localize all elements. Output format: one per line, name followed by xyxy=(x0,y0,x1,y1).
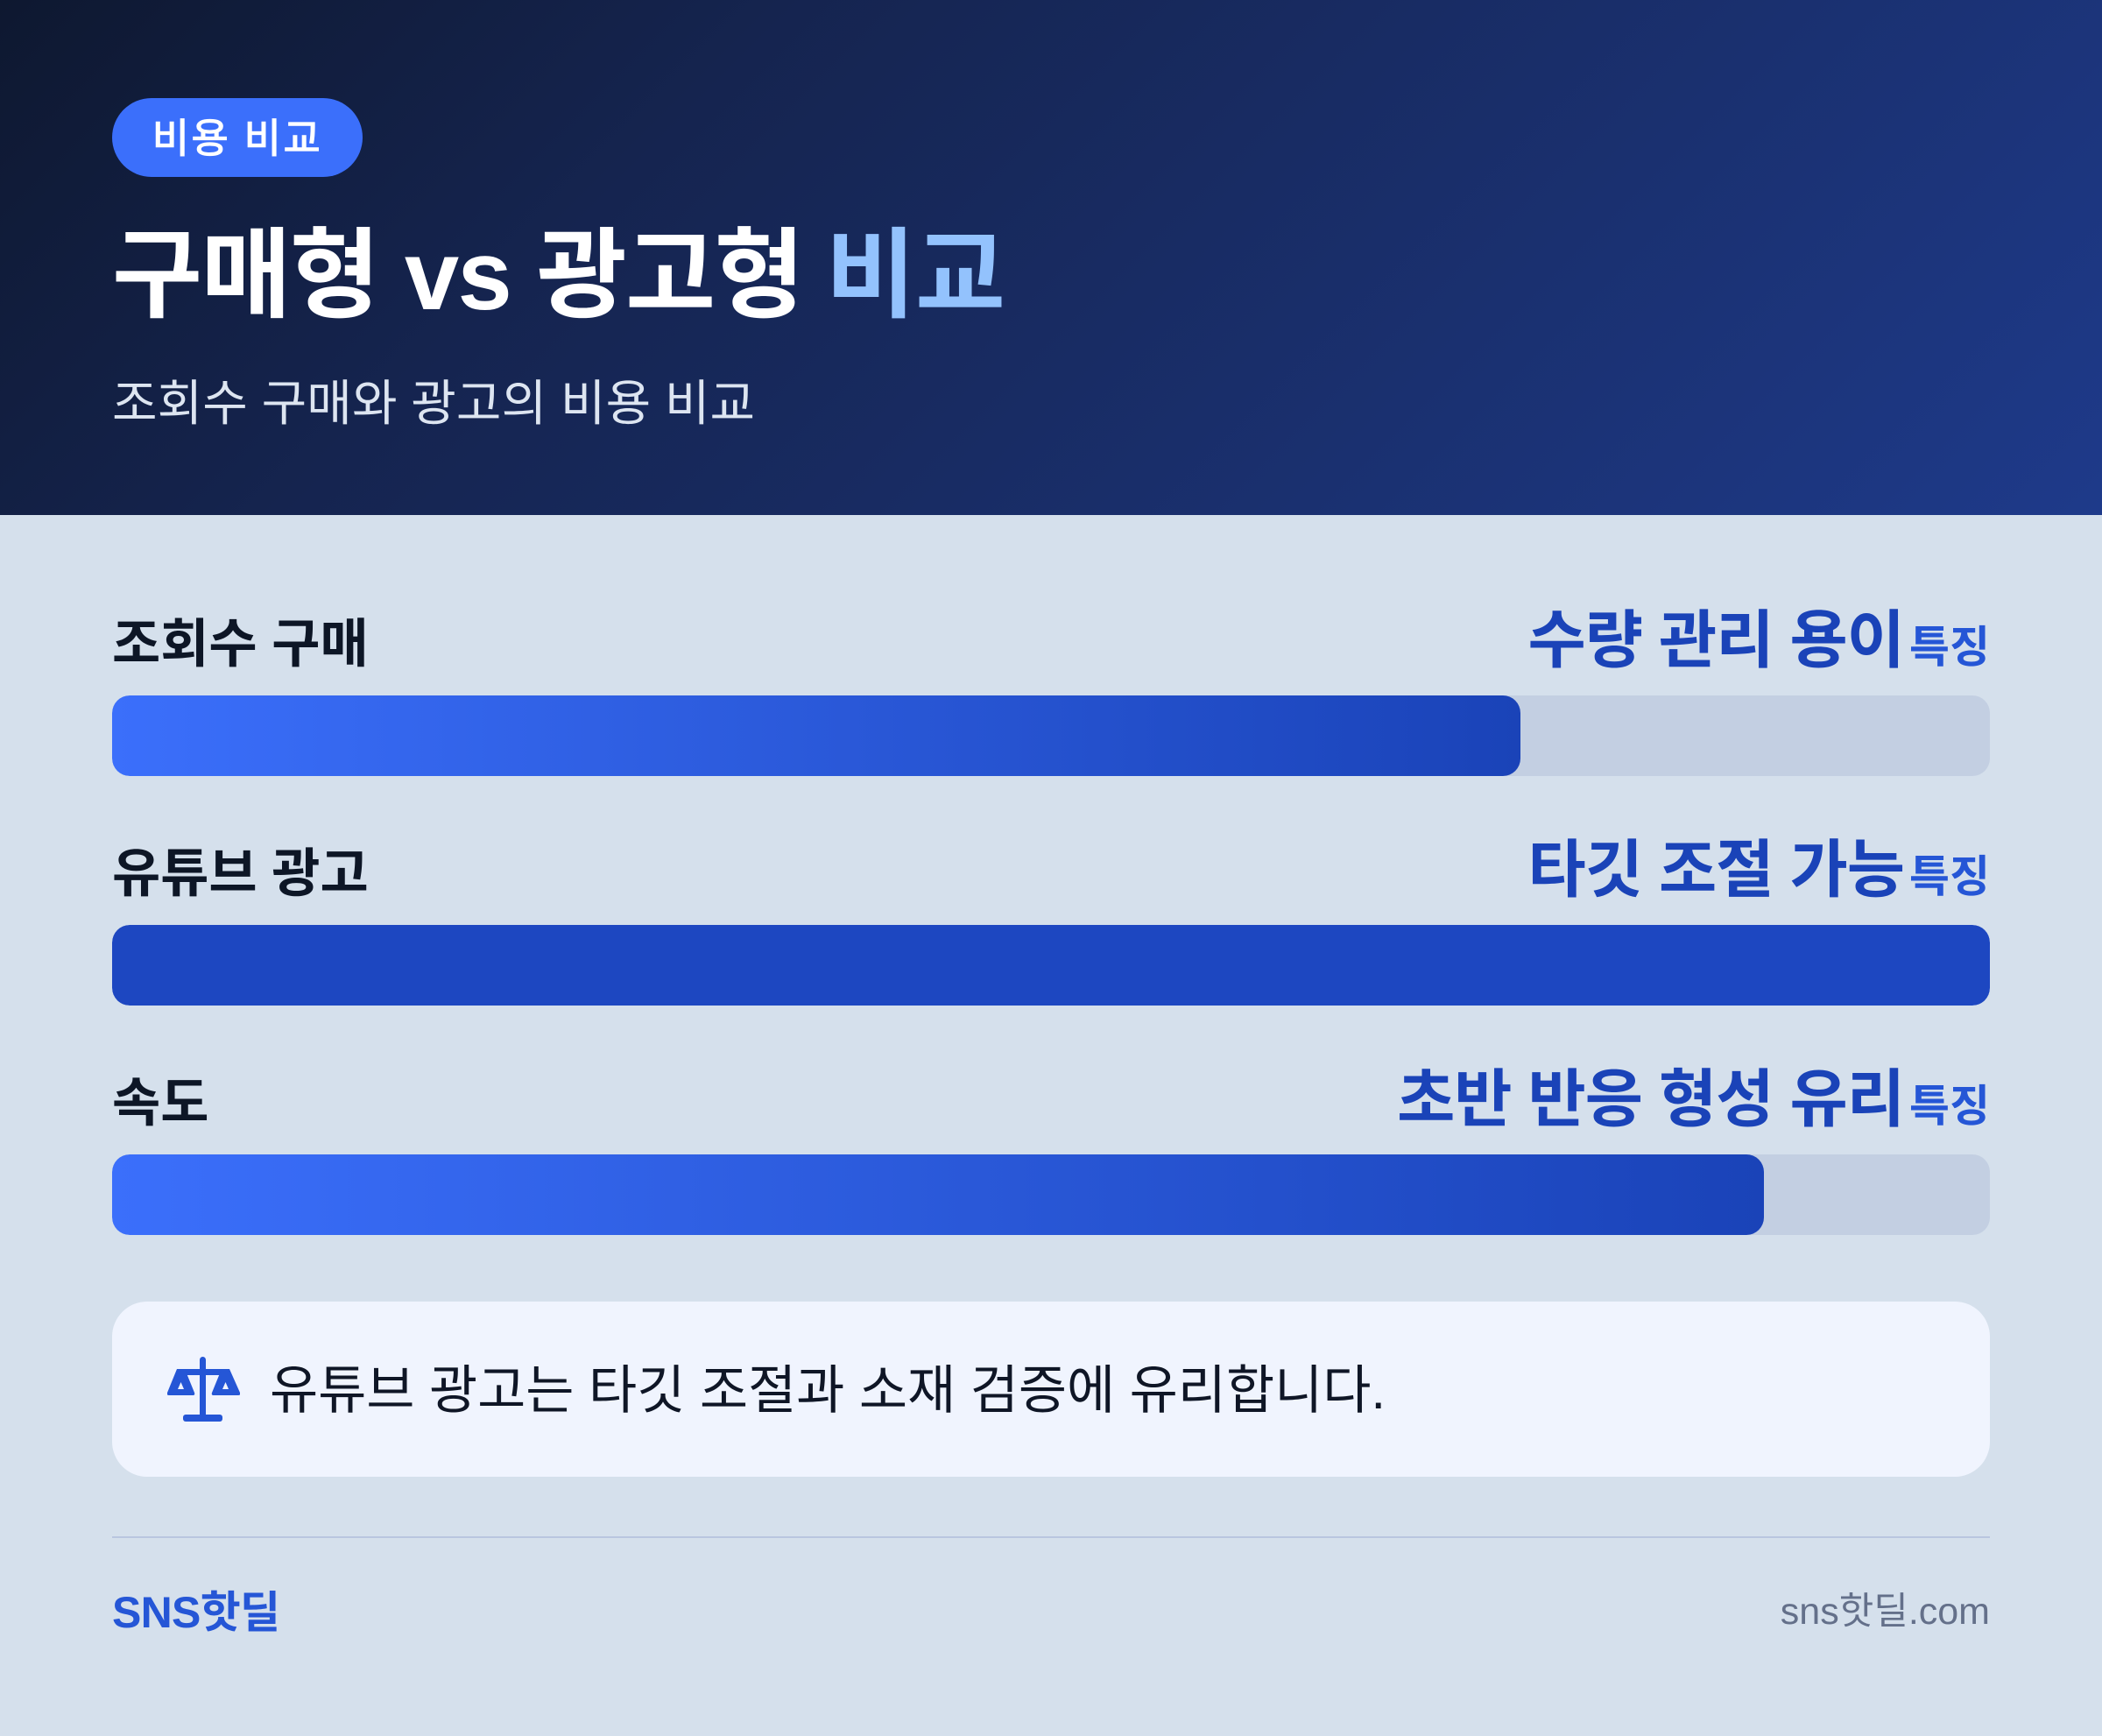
callout text: 유튜브 광고는 타깃 조절과 소재 검증에 유리합니다. xyxy=(270,1361,1386,1420)
bar: 유튜브 광고 xyxy=(112,925,1990,1006)
row value: 타깃 조절 가능: 타깃 조절 가능특징 xyxy=(1528,836,1990,906)
footer url: sns핫딜.com xyxy=(1781,1591,1990,1633)
title: 구매형 vs 광고형 비교 xyxy=(112,221,1005,330)
subtitle: 조회수 구매와 광고의 비용 비교 xyxy=(112,376,755,431)
bar: 속도 xyxy=(112,1154,1990,1235)
row label: 속도: 속도 xyxy=(112,1074,208,1133)
row value: 초반 반응 형성 유리: 초반 반응 형성 유리특징 xyxy=(1397,1065,1990,1135)
callout card xyxy=(112,1302,1990,1477)
bar: 조회수 구매 xyxy=(112,695,1990,776)
header band xyxy=(0,0,2102,515)
badge: 비용 비교 xyxy=(152,116,322,161)
footer divider xyxy=(112,1536,1990,1538)
row label: 유튜브 광고: 유튜브 광고 xyxy=(112,844,369,903)
footer brand: SNS핫딜 xyxy=(112,1588,279,1637)
row label: 조회수 구매: 조회수 구매 xyxy=(112,615,369,674)
icon: balance scale xyxy=(167,1357,240,1422)
badge xyxy=(112,98,363,177)
row value: 수량 관리 용이: 수량 관리 용이특징 xyxy=(1528,606,1990,676)
